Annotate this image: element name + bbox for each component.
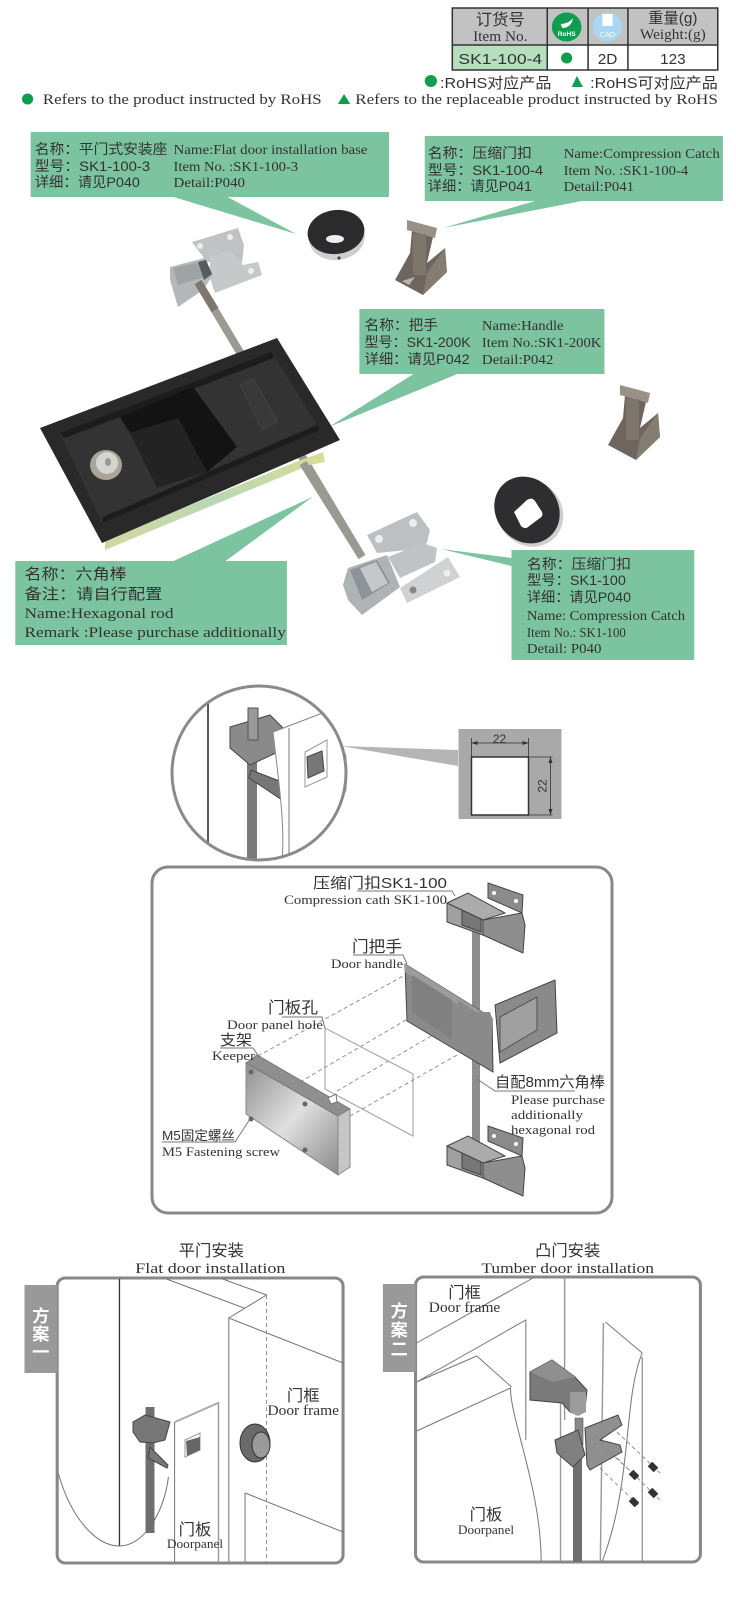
bottom compression catch (447, 1126, 525, 1196)
callout: compression catch SK1-100 (441, 549, 694, 660)
product: compression catch (395, 220, 447, 295)
label: hexagonal rod: additionally (511, 1107, 584, 1122)
callout: handle: 详细：请见P042 (364, 351, 470, 367)
label: keeper (212, 1032, 260, 1063)
icon: CAD (593, 12, 622, 42)
label: door panel hole: 门板孔 (268, 999, 318, 1017)
table header: weight: 重量(g) (648, 10, 697, 27)
callout: handle: Item No.:SK1-200K (482, 335, 602, 350)
callout: handle: 名称：把手 (364, 317, 438, 333)
callout: compression catch SK1-100-4: 详细：请见P041 (428, 178, 532, 194)
legend: English: Refers to the product instructed by RoHS (43, 91, 322, 108)
callout: flat door installation base (31, 132, 389, 234)
label: door frame: Door frame (429, 1300, 500, 1316)
cutout dimensions 22x22: 22 (536, 779, 550, 793)
callout: compression catch SK1-100-4: 名称：压缩门扣 (428, 145, 532, 161)
icon: RoHS (552, 12, 581, 42)
heading: tumber door: Tumber door installation (481, 1260, 654, 1277)
product: top latch (170, 228, 262, 310)
callout: compression catch SK1-100: Name: Compression Catch (527, 608, 685, 624)
heading: flat door (135, 1242, 286, 1277)
label: hexagonal rod: Please purchase (511, 1092, 605, 1107)
door panel glass (325, 1028, 413, 1136)
RoHS dot (561, 52, 572, 64)
label: hexagonal rod: hexagonal rod (511, 1122, 596, 1137)
label: door panel hole (227, 999, 325, 1032)
legend: Chinese: :RoHS可对应产品 (590, 74, 718, 92)
table header: item no (473, 11, 527, 45)
top compression catch (447, 883, 525, 953)
heading: tumber door: 凸门安装 (535, 1242, 600, 1260)
label: door panel: Doorpanel (458, 1522, 514, 1537)
icon: CAD: CAD (600, 32, 615, 39)
label: M5 screw: M5 Fastening screw (162, 1144, 281, 1159)
lock cylinder (90, 450, 122, 480)
label: M5 screw: M5固定螺丝 (162, 1128, 235, 1143)
tab: plan two: 方 (391, 1301, 408, 1321)
item number: SK1-100-4 (458, 51, 542, 68)
callout: flat door installation base: Item No. :SK1-100-3 (174, 159, 298, 174)
label: door panel hole: Door panel hole (227, 1017, 323, 1032)
callout: handle: Detail:P042 (482, 352, 554, 367)
callout: compression catch SK1-100-4: Item No. :SK1-100-4 (564, 163, 688, 178)
label: compression catch (284, 875, 455, 907)
rod (198, 282, 362, 557)
assembly dashed guides (258, 975, 457, 1116)
callout: flat door installation base: 型号：SK1-100-3 (35, 158, 150, 174)
panel: flat door (57, 1278, 343, 1563)
panel: exploded assembly (152, 867, 612, 1213)
label: door handle: Door handle (331, 956, 403, 971)
connector wedge (341, 746, 458, 766)
callout: hexagonal rod (15, 497, 312, 645)
tab: plan one: 方 (32, 1306, 50, 1326)
callout: hexagonal rod: 名称：六角棒 (25, 566, 127, 583)
label: compression catch: 压缩门扣SK1-100 (313, 875, 447, 892)
callout: compression catch SK1-100: Detail: P040 (527, 641, 601, 657)
detail view: magnifier circle (172, 685, 346, 860)
product: bottom latch (343, 512, 460, 615)
callout: compression catch SK1-100-4: Name:Compression Catch (564, 146, 720, 161)
table header: item no: Item No. (473, 28, 527, 45)
cutout dimensions 22x22: 22 (493, 732, 506, 746)
callout: compression catch SK1-100: Item No.: SK1-100 (527, 625, 626, 641)
label: door frame: Door frame (268, 1403, 339, 1419)
callout: compression catch SK1-100: 型号：SK1-100 (527, 572, 626, 588)
label: keeper: Keeper (212, 1048, 256, 1063)
product: round mount (305, 206, 368, 264)
label: door frame: 门框 (448, 1284, 481, 1302)
legend: Chinese: :RoHS对应产品 (440, 74, 551, 92)
callout: handle: 型号：SK1-200K (364, 334, 471, 350)
label: compression catch: Compression cath SK1-100 (284, 892, 447, 907)
label: door frame (268, 1387, 339, 1419)
rod lower segment (303, 463, 362, 557)
tab: plan two: 案 (391, 1320, 408, 1340)
cutout dimensions 22x22 (458, 729, 562, 819)
icon: RoHS: RoHS (558, 31, 576, 38)
callout: handle: Name:Handle (482, 318, 564, 333)
round mount (240, 1424, 270, 1462)
cutout (185, 1433, 200, 1457)
handle (405, 964, 557, 1072)
product: handle (40, 338, 340, 550)
panel: tumber door (416, 1277, 700, 1562)
product: catch 2 (608, 385, 660, 460)
label: door frame (429, 1284, 500, 1316)
product: round mount 2 (481, 463, 577, 560)
callout: compression catch SK1-100-4: Detail:P041 (564, 179, 634, 194)
tab: plan one (25, 1285, 57, 1373)
callout: flat door installation base: Detail:P040 (174, 175, 245, 190)
heading: flat door: Flat door installation (135, 1260, 286, 1277)
callout: flat door installation base: 名称：平门式安装座 (35, 141, 167, 157)
label: keeper: 支架 (220, 1032, 252, 1049)
label: door panel: 门板 (470, 1506, 502, 1524)
CAD value: 2D (598, 51, 617, 68)
callout: hexagonal rod: Remark :Please purchase additionally (25, 624, 286, 641)
label: door handle (331, 938, 407, 971)
callout: hexagonal rod: Name:Hexagonal rod (25, 605, 174, 622)
callout: compression catch SK1-100: 名称：压缩门扣 (527, 556, 631, 572)
label: door handle: 门把手 (352, 938, 402, 956)
label: door panel (458, 1506, 514, 1537)
callout: compression catch SK1-100: 详细：请见P040 (527, 589, 631, 605)
legend: Chinese (425, 74, 718, 92)
legend: English: Refers to the replaceable product instructed by RoHS (355, 91, 718, 108)
legend: English (22, 91, 718, 108)
rod and latch (133, 1403, 218, 1533)
label: M5 screw (162, 1119, 281, 1159)
tab: plan one: 案 (32, 1324, 50, 1344)
screws (600, 1432, 660, 1507)
callout: handle (329, 309, 604, 427)
callout: hexagonal rod: 备注：请自行配置 (25, 586, 162, 603)
callout: flat door installation base: 详细：请见P040 (35, 174, 140, 190)
keeper (246, 1055, 350, 1175)
rod and latch (555, 1415, 622, 1562)
tab: plan two (383, 1284, 416, 1372)
heading: flat door: 平门安装 (179, 1242, 244, 1260)
table header: weight: Weight:(g) (640, 26, 706, 43)
tab: plan one: 一 (32, 1342, 50, 1362)
callout: flat door installation base: Name:Flat door installation base (174, 142, 368, 157)
label: door panel (167, 1521, 223, 1551)
tab: plan two: 二 (391, 1339, 408, 1359)
callout: compression catch SK1-100-4: 型号：SK1-100-4 (428, 162, 543, 178)
heading: tumber door (481, 1242, 654, 1277)
callout: compression catch SK1-100-4 (425, 136, 723, 228)
rod (472, 930, 480, 1145)
weight value: 123 (660, 51, 686, 68)
order table (452, 8, 718, 70)
label: hexagonal rod (477, 1074, 605, 1137)
label: door frame: 门框 (287, 1387, 320, 1405)
catch exploded (530, 1360, 587, 1416)
label: door panel: 门板 (179, 1521, 211, 1539)
table header: weight (640, 10, 706, 43)
label: hexagonal rod: 自配8mm六角棒 (495, 1074, 605, 1091)
table header: item no: 订货号 (476, 11, 525, 29)
label: door panel: Doorpanel (167, 1536, 223, 1551)
